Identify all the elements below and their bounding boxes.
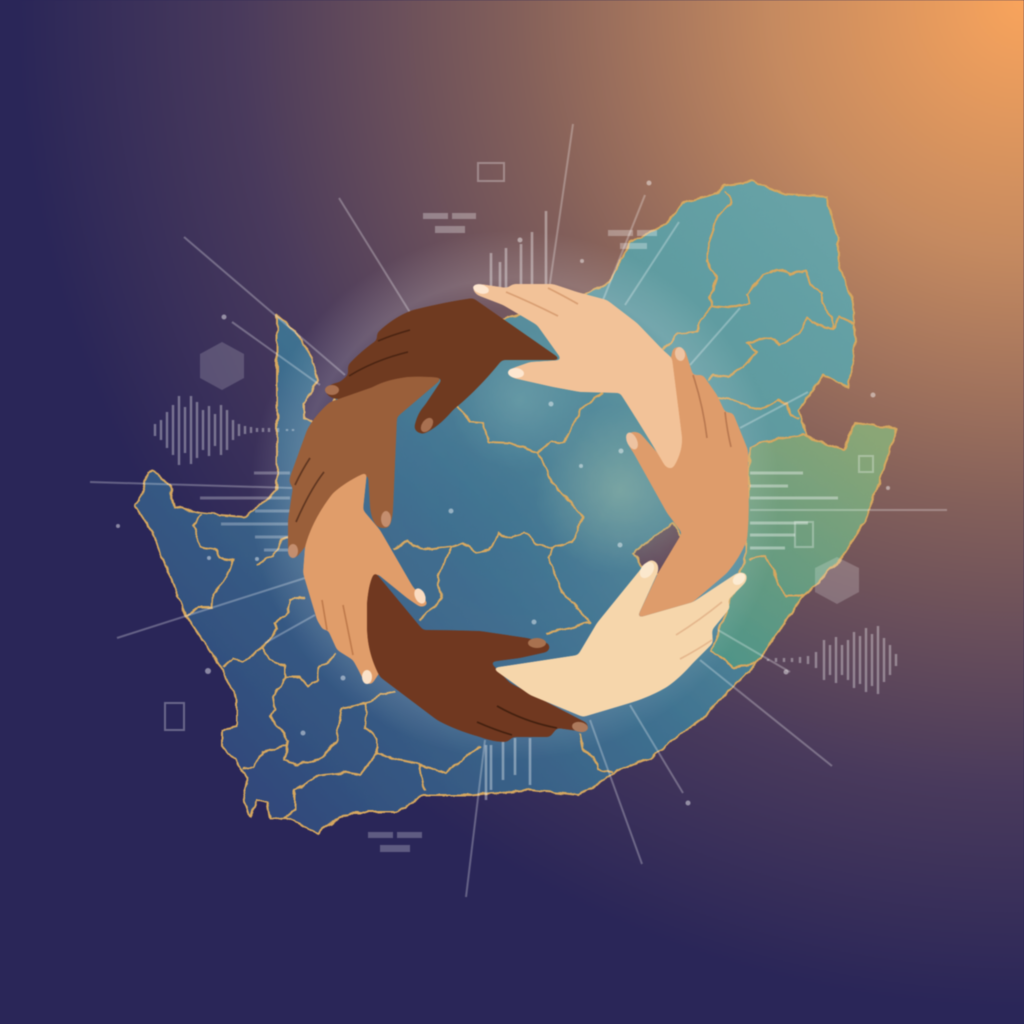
nail <box>325 385 339 395</box>
nail <box>412 587 428 605</box>
nail <box>472 283 490 295</box>
map of South Africa <box>136 181 897 833</box>
waveform: top <box>491 211 546 290</box>
hand: orange right <box>624 346 749 618</box>
province borders <box>187 190 853 817</box>
dash blocks: top right <box>608 230 657 249</box>
nail <box>624 431 640 451</box>
finger creases <box>676 602 722 659</box>
hand: dark brown top <box>325 298 562 434</box>
finger creases <box>693 375 731 447</box>
nail <box>674 346 686 362</box>
nail <box>418 416 436 434</box>
upper glow <box>450 330 590 470</box>
hand: light peach top right <box>472 283 682 469</box>
nail <box>288 544 298 558</box>
country shape <box>136 181 897 833</box>
dash blocks: top centre <box>423 213 476 233</box>
finger creases <box>322 600 353 655</box>
finger creases <box>349 330 410 376</box>
waveform: right <box>768 626 896 694</box>
nail <box>528 638 546 648</box>
hand: dark brown bottom <box>367 572 589 742</box>
outlined rectangles <box>165 163 873 730</box>
hand: orange lower left <box>303 472 428 684</box>
central light glow <box>535 405 705 575</box>
dash blocks: bottom <box>368 832 422 852</box>
nail <box>637 559 657 581</box>
nail <box>381 511 391 527</box>
hand: cream lower right <box>492 559 748 717</box>
nail <box>571 721 589 733</box>
waveform: bottom <box>486 738 530 800</box>
finger creases <box>506 288 578 316</box>
finger creases <box>477 706 557 735</box>
left horizontal data lines <box>200 473 290 550</box>
hexagon: right <box>815 557 859 604</box>
halo around hand ring <box>250 230 780 760</box>
nail <box>508 367 524 379</box>
right horizontal data lines <box>750 473 838 548</box>
scattered dots <box>116 180 890 806</box>
hand: medium brown upper left <box>288 377 443 558</box>
radiating rays <box>90 124 947 897</box>
hexagon: left <box>200 342 244 390</box>
province: KwaZulu-Natal green area <box>712 423 897 668</box>
nail <box>362 670 372 684</box>
finger creases <box>295 458 324 522</box>
nail <box>730 571 748 587</box>
waveform: left <box>155 396 293 465</box>
hand ring <box>288 283 749 742</box>
